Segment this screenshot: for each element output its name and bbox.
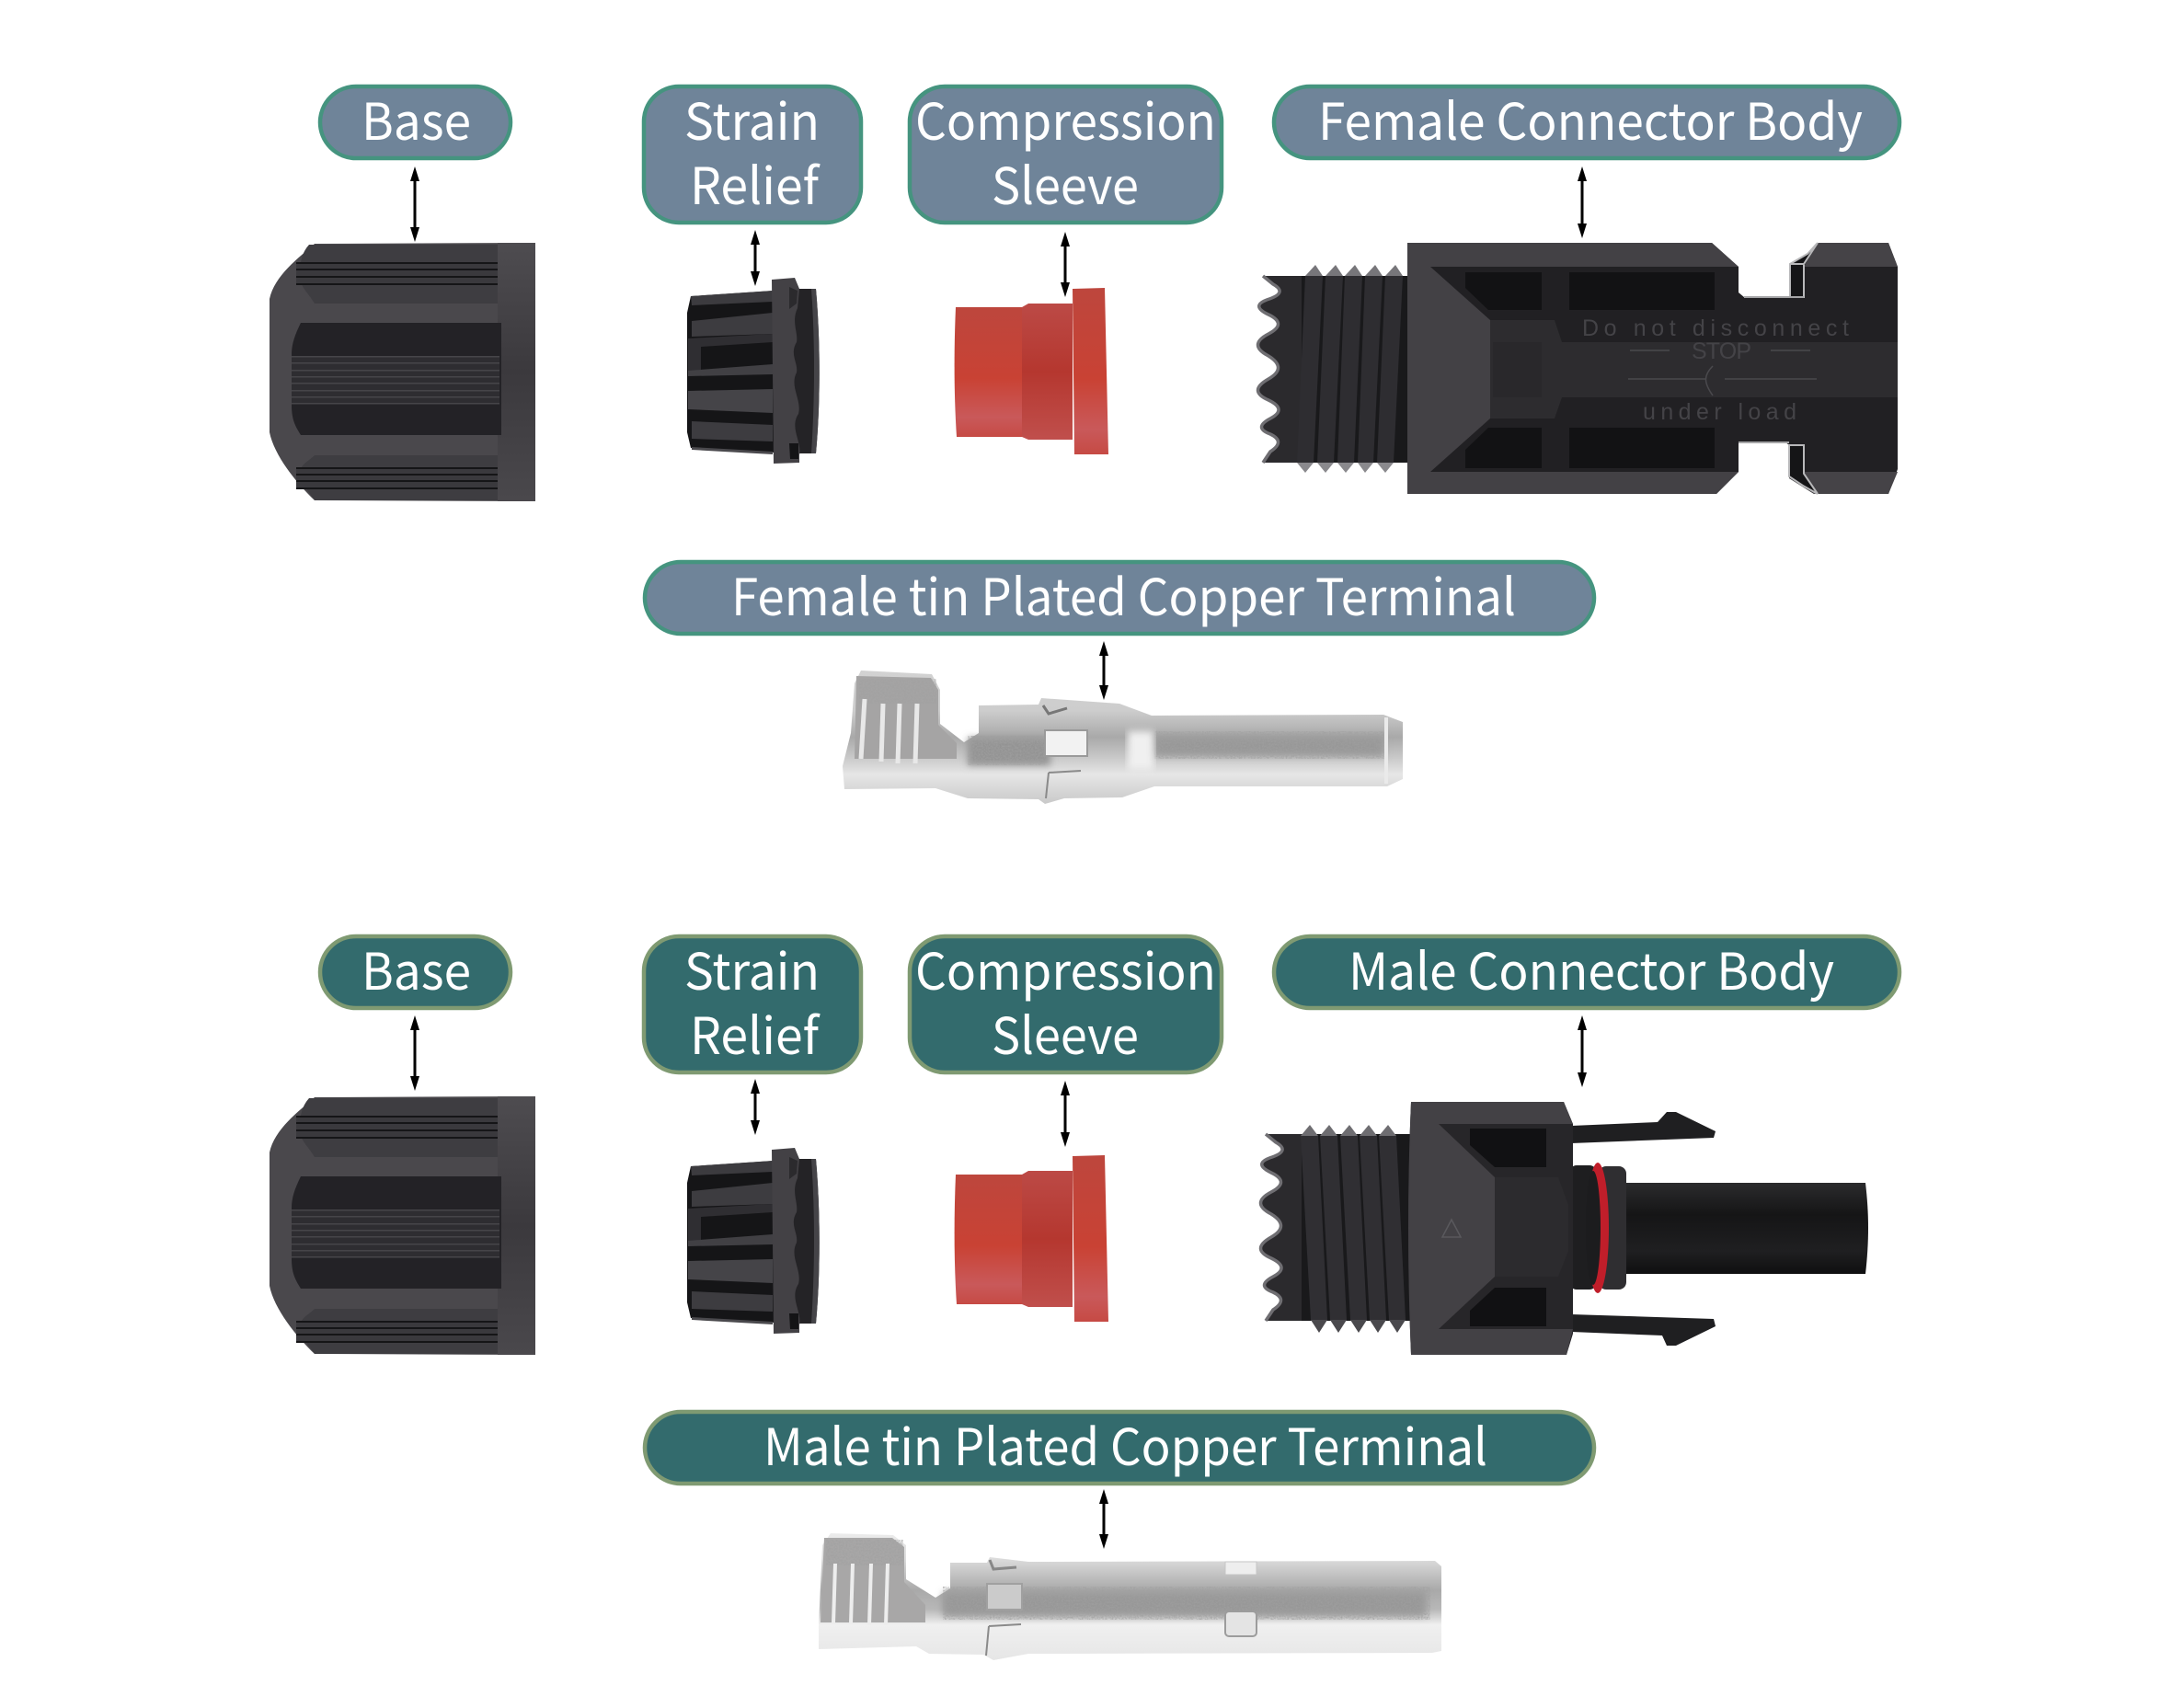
part: female connector body: STOP <box>1692 338 1751 364</box>
pin <box>1619 1183 1868 1274</box>
label: Strain Relief <box>644 931 861 1072</box>
label: Strain Relief: Strain <box>684 81 820 155</box>
housing <box>1408 1102 1573 1355</box>
label: Compression Sleeve <box>910 931 1222 1072</box>
part: compression sleeve <box>955 288 1108 454</box>
arrow: male body <box>1578 1015 1587 1087</box>
label: Base: Base <box>362 931 471 1004</box>
label: Strain Relief: Strain <box>684 931 820 1004</box>
arrow: compression sleeve <box>1061 232 1070 297</box>
label: Compression Sleeve: Compression <box>915 931 1216 1004</box>
part: base nut <box>270 1096 535 1355</box>
part: male connector body <box>1260 1102 1868 1355</box>
part: male terminal <box>819 1533 1441 1660</box>
arrow: female body <box>1578 166 1587 238</box>
clips <box>1571 1112 1716 1346</box>
arrow: strain relief <box>751 230 760 286</box>
label: Compression Sleeve <box>910 81 1222 223</box>
part: female connector body <box>1258 243 1898 494</box>
label: Male tin Plated Copper Terminal: Male tin Plated Copper Terminal <box>763 1406 1487 1480</box>
label: Strain Relief: Relief <box>690 145 821 219</box>
label: Compression Sleeve: Compression <box>915 81 1216 155</box>
arrow: base <box>410 1015 419 1091</box>
thread and crown <box>1258 265 1410 473</box>
part: female terminal <box>843 671 1403 804</box>
label: Male Connector Body: Male Connector Body <box>1348 931 1834 1004</box>
label: Compression Sleeve: Sleeve <box>992 995 1139 1069</box>
housing <box>1407 243 1898 494</box>
engraved text: Do not disconnect <box>1582 315 1849 341</box>
part: female connector body: under load <box>1643 399 1796 425</box>
label: Compression Sleeve: Sleeve <box>992 145 1139 219</box>
part: compression sleeve <box>955 1155 1108 1322</box>
latch slots <box>1790 243 1818 297</box>
part: strain relief <box>687 278 820 464</box>
label: Base: Base <box>362 81 471 155</box>
arrow: male terminal <box>1099 1489 1108 1549</box>
arrow: female terminal <box>1099 641 1108 700</box>
label: Base <box>320 81 511 158</box>
label: Female tin Plated Copper Terminal: Female tin Plated Copper Terminal <box>731 556 1516 630</box>
label: Base <box>320 931 511 1008</box>
arrow: base <box>410 166 419 242</box>
thread and crown <box>1260 1125 1411 1333</box>
label: Strain Relief: Relief <box>690 995 821 1069</box>
arrow: compression sleeve <box>1061 1081 1070 1147</box>
arrow: strain relief <box>751 1079 760 1135</box>
part: base nut <box>270 243 535 501</box>
panel: male connector parts <box>270 931 1899 1660</box>
neck and o-ring <box>1569 1165 1597 1290</box>
part: strain relief <box>687 1148 820 1334</box>
label: Strain Relief <box>644 81 861 223</box>
label: Female Connector Body: Female Connector Body <box>1318 81 1863 155</box>
panel: female connector parts <box>270 81 1899 804</box>
